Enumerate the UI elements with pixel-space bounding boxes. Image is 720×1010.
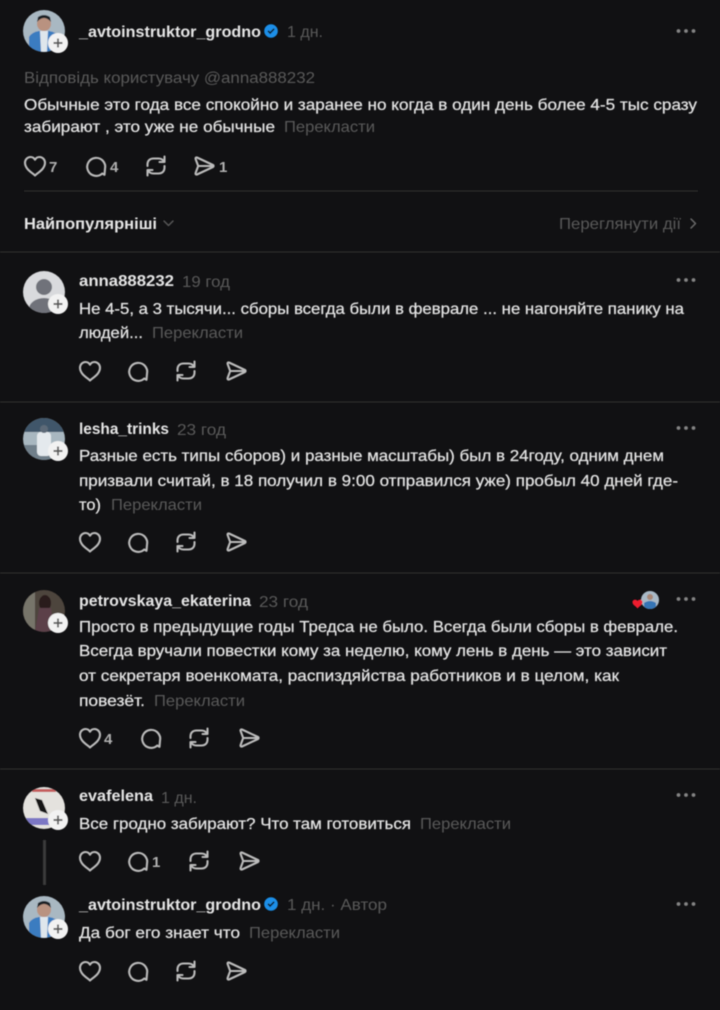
icon: more menu (677, 29, 695, 33)
timestamp: 23 год (259, 594, 309, 611)
avatar: author (23, 10, 68, 53)
icon: verified badge (264, 24, 278, 38)
reply text (79, 925, 340, 942)
icon: more menu (677, 793, 695, 797)
username: anna888232 (79, 273, 174, 290)
action row with counts (80, 728, 259, 748)
icon: more menu (677, 902, 695, 906)
action row (80, 532, 246, 552)
icon: more menu (677, 597, 695, 601)
action row (80, 962, 246, 981)
timestamp: 23 год (177, 422, 227, 439)
action row with count: 1 (152, 854, 160, 871)
action row with counts: 4 (110, 159, 119, 176)
avatar: anna888232 (23, 271, 68, 320)
timestamp and author tag: 1 дн. · Автор (287, 897, 387, 914)
liked-by indicator (632, 591, 659, 609)
panel: reply petrovskaya_ekaterina (23, 590, 695, 748)
reply text: Перекласти (420, 816, 511, 833)
reply text: Да бог его знает что (79, 925, 240, 942)
sort bar (24, 216, 696, 233)
timestamp: 1 дн. (287, 24, 323, 41)
post text (24, 97, 697, 136)
reply text: то) (79, 497, 101, 514)
icon: more menu (677, 426, 695, 430)
reply-to line: Відповідь користувачу @anna888232 (24, 70, 315, 87)
username: evafelena (79, 788, 153, 805)
author name: _avtoinstruktor_grodno (78, 897, 261, 914)
reply text: Не 4-5, а 3 тысячи... сборы всегда были в феврале ... не нагоняйте панику на (79, 301, 684, 318)
view activity link: Переглянути дії (559, 216, 682, 233)
action row with counts (25, 156, 227, 176)
reply text: Все гродно забирают? Что там готовиться (79, 816, 411, 833)
reply text: Перекласти (152, 325, 243, 342)
reply text: людей... (79, 325, 143, 342)
reply text (79, 448, 678, 514)
icon: verified badge (264, 897, 278, 911)
timestamp: 1 дн. (161, 790, 197, 807)
username: petrovskaya_ekaterina (79, 593, 251, 610)
panel: main post (23, 10, 697, 176)
sort label: Найпопулярніші (24, 216, 157, 233)
username: lesha_trinks (79, 421, 169, 438)
icon: more menu (677, 278, 695, 282)
author name: _avtoinstruktor_grodno (78, 24, 261, 41)
reply text: Просто в предыдущие годы Тредса не было. Всегда были сборы в феврале. (79, 619, 678, 636)
panel: reply anna888232 (23, 271, 695, 381)
reply text: повезёт. (79, 693, 145, 710)
reply text: Перекласти (249, 925, 340, 942)
icon: activity chevron (691, 219, 696, 228)
reply text: Перекласти (154, 693, 245, 710)
action row with counts: 1 (219, 159, 227, 176)
avatar: petrovskaya_ekaterina (23, 590, 68, 633)
action row (80, 362, 246, 381)
reply text: Всегда вручали повестки кому за неделю, кому лень в день — это зависит (79, 643, 668, 660)
panel: reply evafelena (23, 787, 695, 885)
post text: Перекласти (284, 119, 375, 136)
action row with counts: 7 (49, 159, 57, 176)
thread connector (43, 840, 46, 885)
avatar: evafelena (23, 787, 68, 830)
panel: reply author (23, 896, 695, 981)
reply text (79, 619, 678, 710)
action row with count (80, 852, 259, 871)
avatar: lesha_trinks (23, 418, 68, 461)
timestamp: 19 год (182, 274, 231, 291)
reply text: призвали считай, в 18 получил в 9:00 отправился уже) пробыл 40 дней где- (79, 473, 678, 490)
reply text: Перекласти (111, 497, 202, 514)
icon: sort chevron (164, 221, 173, 226)
post text: забирают , это уже не обычные (24, 119, 275, 136)
action row with counts: 4 (104, 731, 113, 748)
reply text: Разные есть типы сборов) и разные масштабы) был в 24году, одним днем (79, 448, 664, 465)
reply text (79, 301, 684, 342)
post text: Обычные это года все спокойно и заранее но когда в один день более 4-5 тыс сразу (24, 97, 697, 114)
avatar: author (23, 896, 68, 939)
reply text: от секретаря военкомата, распиздяйства работников и в целом, как (79, 668, 620, 685)
panel: reply lesha_trinks (23, 418, 695, 552)
